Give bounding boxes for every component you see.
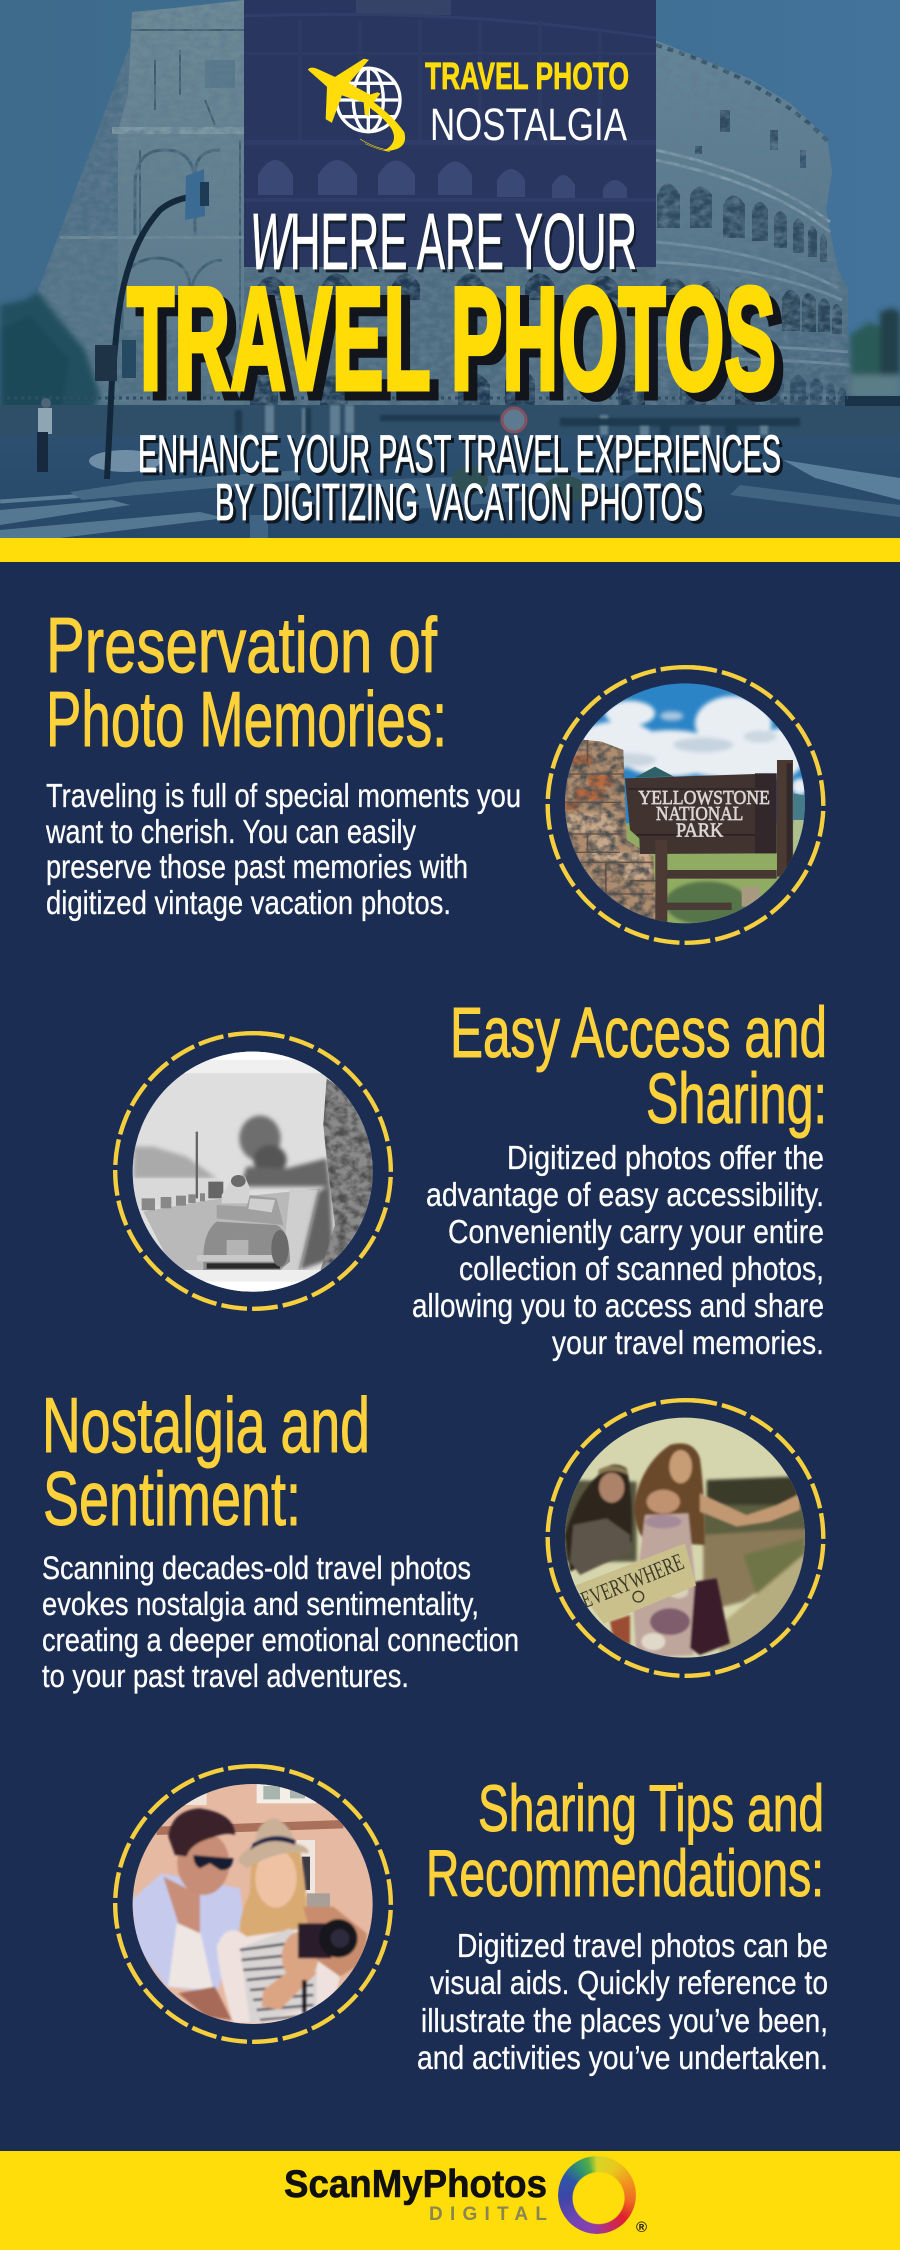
photo: hitchhikers with sign — [563, 1415, 810, 1662]
dashed ring — [93, 1744, 413, 2064]
dashed ring — [93, 1011, 413, 1331]
header logo: plane and globe — [308, 59, 405, 152]
photo: couple with camera — [130, 1780, 377, 2027]
upper arcade arches — [657, 184, 827, 262]
camera and hands — [260, 1970, 317, 2011]
body text: digitized vintage vacation photos. — [46, 884, 451, 921]
heading: Nostalgia and Sentiment: Nostalgia and — [42, 1381, 370, 1469]
photo: vintage car black and white — [130, 1048, 377, 1295]
footer logo text: ScanMyPhotos — [284, 2163, 547, 2206]
body text: preserve those past memories with — [46, 848, 468, 885]
hat — [238, 1818, 308, 1868]
footer logo text: DIGITAL — [429, 2204, 547, 2225]
body text — [412, 1139, 824, 1361]
body text — [42, 1550, 519, 1694]
body text: illustrate the places you’ve been, — [421, 2002, 828, 2039]
plane with swoosh — [308, 59, 405, 152]
left buttress of Colosseum — [38, 46, 130, 296]
section 2: easy access — [93, 994, 827, 1361]
dashed ring — [525, 645, 846, 965]
heading: Sharing Tips and Recommendations — [426, 1771, 824, 1910]
body text: Conveniently carry your entire — [448, 1213, 824, 1250]
car — [197, 1175, 290, 1270]
traffic light pole — [95, 169, 209, 479]
footer logo text: ® — [636, 2219, 647, 2236]
sign lettering: YELLOWSTONE — [638, 787, 770, 809]
middle arcade arches — [660, 278, 842, 334]
body text: visual aids. Quickly reference to — [430, 1964, 828, 2001]
body text: want to cherish. You can easily — [45, 813, 416, 850]
section 4: sharing tips — [93, 1744, 828, 2076]
globe — [337, 68, 400, 132]
heading: Preservation of Photo Memories — [46, 601, 447, 763]
body text: Digitized photos offer the — [507, 1139, 824, 1176]
section 3: nostalgia — [42, 1378, 846, 1698]
footer logo text — [284, 2163, 647, 2236]
right side of Colosseum — [650, 38, 858, 412]
right woman — [633, 1443, 705, 1545]
stone texture overlay — [18, 0, 858, 412]
body text — [45, 777, 521, 921]
heading: Preservation of Photo Memories: Preservation of — [46, 601, 437, 689]
footer band — [0, 2151, 900, 2250]
body text: Scanning decades-old travel photos — [42, 1550, 471, 1586]
left woman — [565, 1465, 632, 1572]
heading: Nostalgia and Sentiment — [42, 1381, 370, 1542]
photo: Yellowstone sign: PARK — [676, 820, 724, 842]
dashed ring — [525, 1378, 846, 1698]
yellow divider band — [0, 538, 900, 562]
footer logo: rainbow ring — [558, 2156, 636, 2234]
body text: collection of scanned photos, — [459, 1250, 824, 1287]
lower arcade arches — [770, 375, 846, 405]
heading: Nostalgia and Sentiment: Sentiment: — [43, 1457, 301, 1542]
heading: Easy Access and Sharing — [450, 994, 827, 1139]
body text: advantage of easy accessibility. — [426, 1176, 824, 1213]
body text: Traveling is full of special moments you — [46, 777, 521, 814]
hero photo: Colosseum — [0, 0, 900, 538]
body text: evokes nostalgia and sentimentality, — [42, 1586, 479, 1622]
pedestrian at left — [37, 398, 52, 472]
middle lower section beneath panel — [244, 267, 760, 412]
body text: your travel memories. — [552, 1324, 824, 1361]
heading: Preservation of Photo Memories: Photo Memories: — [46, 675, 447, 763]
body text: creating a deeper emotional connection — [42, 1622, 519, 1658]
header logo text: NOSTALGIA: NOSTALGIA — [430, 99, 627, 150]
body text: to your past travel adventures. — [42, 1658, 409, 1694]
photo: Yellowstone sign: NATIONAL — [656, 803, 743, 825]
body text — [417, 1927, 828, 2076]
woman hair and sweater — [240, 1850, 307, 1943]
navy translucent header panel — [244, 0, 656, 267]
cardboard sign lettering: EVERYWHERE — [578, 1549, 688, 1614]
body text: Digitized travel photos can be — [457, 1927, 828, 1964]
trees left and right — [0, 290, 900, 405]
man — [132, 1873, 243, 1993]
left ruined wall — [60, 0, 244, 405]
street and crowd — [0, 396, 900, 538]
body text: allowing you to access and share — [412, 1287, 824, 1324]
section 1: preservation — [46, 615, 826, 945]
header logo text: TRAVEL PHOTO: TRAVEL PHOTO — [425, 56, 629, 98]
photo: Yellowstone sign — [563, 680, 810, 927]
body text: and activities you’ve undertaken. — [417, 2039, 828, 2076]
